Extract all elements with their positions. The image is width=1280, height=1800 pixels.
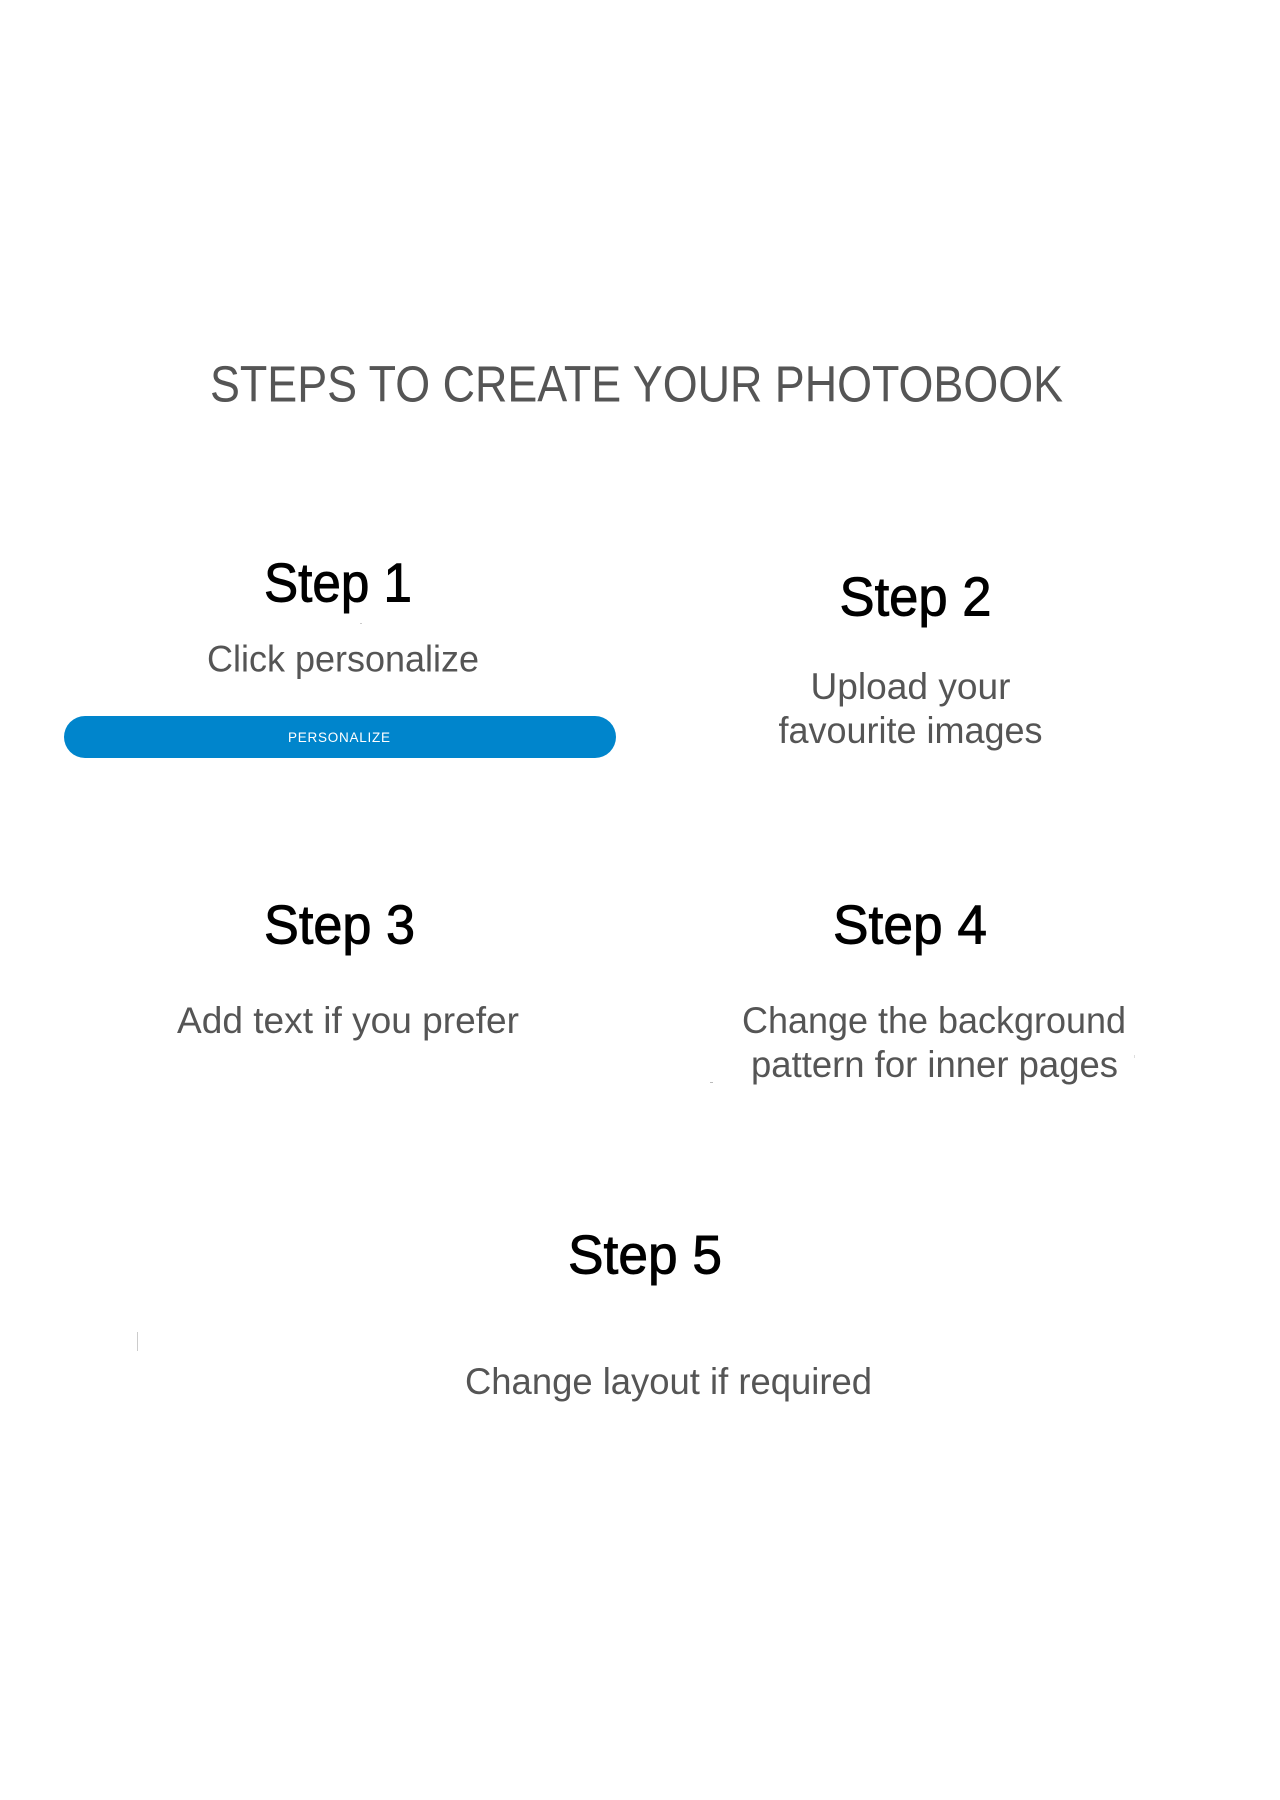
step 2 description: Upload your: [810, 666, 1010, 707]
personalize button: [64, 716, 616, 758]
step 2 description: [778, 666, 1042, 751]
step 4 description: Change the background: [742, 1000, 1126, 1041]
panel: step 3: [177, 894, 519, 1041]
step 1 description: Click personalize: [207, 638, 479, 680]
step 3 description: Add text if you prefer: [177, 1000, 519, 1041]
step 1 heading: Step 1: [264, 552, 412, 614]
step 5 description: Change layout if required: [465, 1361, 872, 1402]
step 2 description: favourite images: [778, 710, 1042, 751]
panel: step 2: [778, 566, 1042, 751]
step 5 heading: Step 5: [568, 1224, 722, 1286]
panel: step 1: [64, 552, 616, 758]
panel: step 4: [742, 894, 1126, 1085]
step 4 description: pattern for inner pages: [751, 1044, 1118, 1085]
personalize button: PERSONALIZE: [288, 730, 390, 745]
step 2 heading: Step 2: [840, 566, 992, 628]
panel: step 5: [465, 1224, 872, 1402]
title: STEPS TO CREATE YOUR PHOTOBOOK: [210, 356, 1063, 412]
step 3 heading: Step 3: [264, 894, 415, 956]
step 4 heading: Step 4: [833, 894, 987, 956]
step 4 description: [742, 1000, 1126, 1085]
